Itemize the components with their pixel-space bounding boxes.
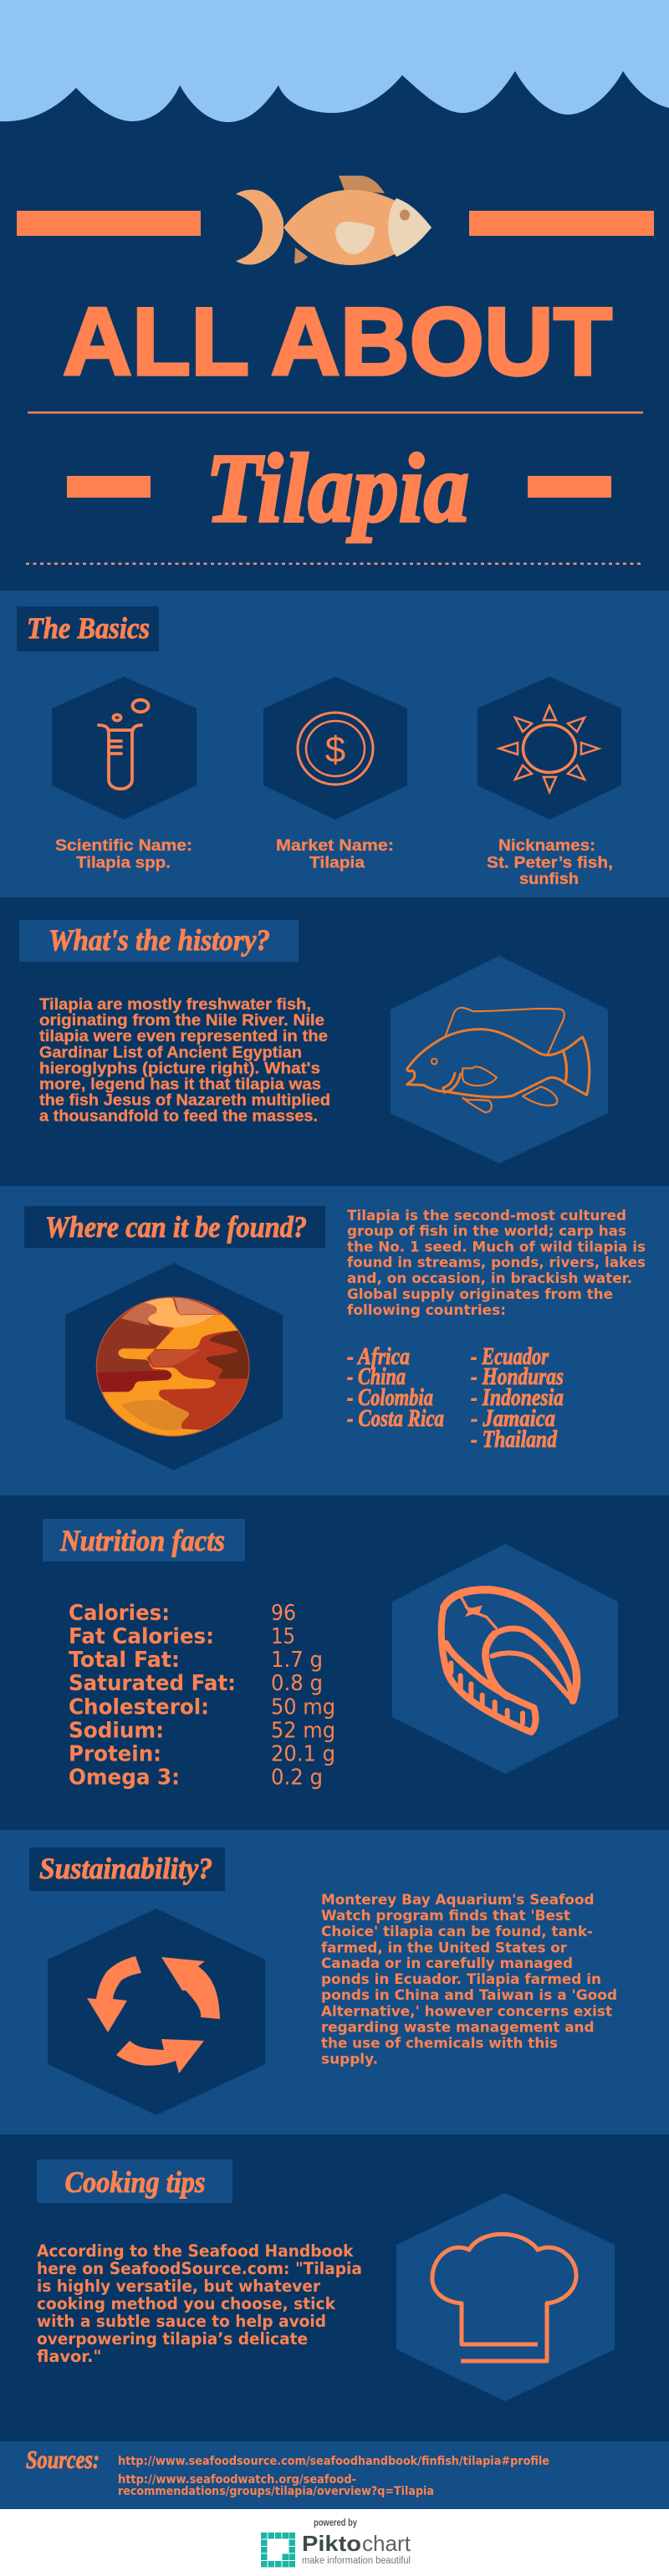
text: history: [39, 995, 330, 1126]
hexagon: salmon steak: [392, 1544, 618, 1774]
icon: piktochart logo: [261, 2533, 295, 2568]
icon: recycle arrows: [87, 1956, 220, 2073]
label: market name: Market Name:: [276, 836, 394, 855]
right bar: [469, 211, 654, 236]
waves: [0, 0, 669, 122]
hexagon: nicknames: [477, 677, 621, 888]
heading: cooking tips: Cooking tips: [65, 2165, 206, 2199]
text: sustainability: Canada or in carefully managed: [321, 1955, 573, 1972]
panel: cooking tips: [0, 2134, 669, 2441]
icon: salmon steak: [442, 1590, 577, 1732]
text: cooking tips: here on SeafoodSource.com: "Tilapia: [37, 2259, 362, 2278]
label: scientific name: Tilapia spp.: [76, 853, 171, 871]
table: nutrition values: 0.8 g: [271, 1671, 323, 1696]
text: sustainability: farmed, in the United States or: [321, 1940, 568, 1957]
text: history: more, legend has it that tilapia was: [39, 1076, 321, 1094]
source links: http://www.seafoodsource.com/seafoodhandbook/finfish/tilapia#profile: [118, 2455, 549, 2468]
wordmark: piktochart: [302, 2531, 411, 2556]
list: countries column two: - Thailand: [471, 1426, 557, 1453]
table: nutrition values: 96: [271, 1601, 296, 1626]
text: sustainability: Monterey Bay Aquarium's Seafood: [321, 1892, 594, 1909]
source links: [118, 2455, 549, 2498]
heading: what's the history: [19, 920, 299, 962]
heading: where can it be found: Where can it be found?: [45, 1210, 307, 1244]
table: nutrition labels: Total Fat:: [69, 1648, 180, 1673]
text: history: Gardinar List of Ancient Egyptian: [39, 1044, 302, 1062]
text: cooking tips: cooking method you choose, stick: [37, 2294, 336, 2313]
wordmark: piktochart: chart: [362, 2531, 411, 2556]
icon: planet: [95, 1296, 250, 1437]
table: nutrition values: 15: [271, 1624, 295, 1649]
panel: footer: [0, 2509, 669, 2576]
text: sustainability: Watch program finds that 'Best: [321, 1908, 570, 1924]
table: nutrition values: 1.7 g: [271, 1648, 323, 1673]
icon: coin: [298, 713, 373, 785]
table: nutrition labels: Cholesterol:: [69, 1694, 209, 1720]
label: nicknames: sunfish: [519, 870, 579, 888]
table: nutrition values: [271, 1601, 335, 1790]
text: where found: the No. 1 seed. Much of wild tilapia is: [347, 1239, 646, 1256]
table: nutrition labels: Calories:: [69, 1601, 170, 1626]
text: sustainability: ponds in Ecuador. Tilapia farmed in: [321, 1971, 601, 1988]
table: nutrition labels: [69, 1601, 236, 1790]
list: countries column two: - Indonesia: [471, 1384, 564, 1411]
heading: what's the history: What's the history?: [49, 923, 270, 957]
text: history: Tilapia are mostly freshwater fish,: [39, 995, 311, 1014]
panel: the basics: [0, 590, 669, 897]
label: nicknames: St. Peter’s fish,: [487, 853, 613, 871]
text: cooking tips: is highly versatile, but whatever: [37, 2277, 320, 2296]
icon: chef hat: [432, 2234, 576, 2361]
panel: history: [0, 897, 669, 1186]
panel: header: [0, 0, 669, 590]
hexagon: chef hat: [396, 2193, 615, 2401]
table: nutrition labels: Protein:: [69, 1741, 161, 1766]
source links: recommendations/groups/tilapia/overview?q=Tilapia: [118, 2485, 434, 2498]
text: history: hieroglyphs (picture right). What's: [39, 1059, 320, 1077]
text: sustainability: Choice' tilapia can be found, tank-: [321, 1924, 593, 1940]
icon: tilapia outline: [407, 1008, 590, 1112]
list: countries column one: [347, 1343, 444, 1432]
text: history: the fish Jesus of Nazareth multiplied: [39, 1091, 330, 1109]
list: countries column two: [471, 1343, 564, 1453]
text: sustainability: ponds in China and Taiwan is a 'Good: [321, 1987, 617, 2004]
table: nutrition values: 0.2 g: [271, 1765, 323, 1790]
list: countries column one: - Colombia: [347, 1384, 433, 1411]
text: cooking tips: According to the Seafood Handbook: [37, 2241, 354, 2261]
list: countries column one: - China: [347, 1363, 406, 1390]
panel: sources: [0, 2441, 669, 2509]
table: nutrition labels: Saturated Fat:: [69, 1671, 236, 1696]
table: nutrition values: 20.1 g: [271, 1741, 335, 1766]
text: history: originating from the Nile River. Nile: [39, 1011, 324, 1030]
text: cooking tips: flavor.": [37, 2347, 102, 2366]
list: countries column two: - Ecuador: [471, 1343, 549, 1370]
text: sustainability: regarding waste management and: [321, 2019, 594, 2036]
table: nutrition labels: Omega 3:: [69, 1765, 180, 1790]
right bar: [528, 476, 611, 498]
hexagon: recycle: [48, 1909, 265, 2115]
divider line: [28, 411, 643, 413]
panel: where found: [0, 1186, 669, 1495]
left bar: [17, 211, 201, 236]
text: cooking tips: overpowering tilapia’s delicate: [37, 2329, 308, 2349]
icon: coin: $: [325, 729, 345, 770]
hexagon: scientific name: [52, 677, 197, 871]
icon: sun: [499, 706, 599, 792]
heading: cooking tips: [37, 2159, 232, 2203]
text: sustainability: supply.: [321, 2051, 378, 2067]
text: cooking tips: with a subtle sauce to help avoid: [37, 2312, 326, 2331]
title: tilapia: Tilapia: [206, 433, 469, 543]
powered by: powered by: [314, 2518, 357, 2528]
panel: sustainability: [0, 1830, 669, 2134]
text: where found: and, on occasion, in brackish water.: [347, 1270, 632, 1287]
text: where found: Global supply originates from the: [347, 1286, 613, 1303]
hexagon: hieroglyph fish: [391, 956, 608, 1163]
hexagon: planet: [65, 1263, 283, 1470]
title: all about: ALL ABOUT: [63, 289, 612, 396]
text: sustainability: [321, 1892, 617, 2067]
label: nicknames: Nicknames:: [498, 836, 595, 855]
text: history: a thousandfold to feed the masses.: [39, 1107, 318, 1126]
table: nutrition values: 52 mg: [271, 1718, 335, 1743]
table: nutrition labels: Sodium:: [69, 1718, 164, 1743]
list: countries column two: - Honduras: [471, 1363, 564, 1390]
text: history: tilapia were even represented in the: [39, 1027, 328, 1045]
table: nutrition labels: Fat Calories:: [69, 1624, 214, 1649]
heading: nutrition facts: Nutrition facts: [59, 1524, 225, 1557]
heading: the basics: The Basics: [27, 611, 150, 645]
heading: sustainability: Sustainability?: [39, 1852, 212, 1885]
list: countries column two: - Jamaica: [471, 1405, 555, 1432]
icon: test tube: [99, 700, 149, 789]
text: where found: [347, 1208, 646, 1319]
text: where found: found in streams, ponds, rivers, lakes: [347, 1255, 646, 1271]
text: sustainability: the use of chemicals with this: [321, 2036, 558, 2052]
left bar: [67, 476, 151, 498]
label: scientific name: [55, 836, 192, 871]
wordmark: piktochart: Pikto: [302, 2531, 361, 2556]
icon: fish: [236, 176, 432, 265]
text: where found: following countries:: [347, 1302, 506, 1319]
list: countries column one: - Africa: [347, 1343, 410, 1370]
label: nicknames: [487, 836, 613, 888]
table: nutrition values: 50 mg: [271, 1694, 335, 1720]
hexagon: market name: [263, 677, 407, 871]
label: market name: Tilapia: [309, 853, 365, 871]
text: sustainability: Alternative,' however concerns exist: [321, 2004, 612, 2021]
dotted line: [26, 563, 641, 565]
tagline: make information beautiful: [302, 2556, 411, 2566]
list: countries column one: - Costa Rica: [347, 1405, 444, 1432]
text: cooking tips: [37, 2241, 362, 2366]
text: where found: group of fish in the world; carp has: [347, 1223, 626, 1239]
label: market name: [276, 836, 394, 871]
text: where found: Tilapia is the second-most cultured: [347, 1208, 626, 1224]
heading: the basics: [17, 606, 159, 652]
label: scientific name: Scientific Name:: [55, 836, 192, 855]
heading: sources: Sources:: [26, 2445, 100, 2474]
source links: http://www.seafoodwatch.org/seafood-: [118, 2473, 356, 2487]
panel: nutrition facts: [0, 1495, 669, 1830]
